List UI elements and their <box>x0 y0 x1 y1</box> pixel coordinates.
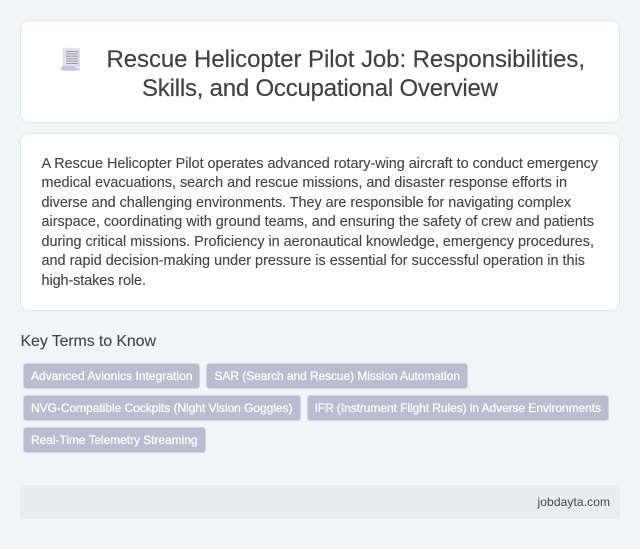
text block: description: and rapid decision-making under pressure is essential for successful operation in this <box>42 253 585 269</box>
tag: IFR: IFR (Instrument Flight Rules) in Adverse Environments <box>314 401 601 415</box>
footer <box>20 485 620 519</box>
tag: advanced avionics <box>24 364 200 388</box>
footer: jobdayta.com <box>536 495 610 509</box>
text block: description <box>42 156 599 289</box>
text block: description: diverse and challenging environments. They are responsible for navigating complex <box>42 195 572 211</box>
icon: document scroll <box>61 48 80 71</box>
tag: advanced avionics: Advanced Avionics Integration <box>31 369 192 383</box>
text block: description: during critical missions. Proficiency in aeronautical knowledge, emergency procedures, <box>42 234 594 250</box>
text block: description: A Rescue Helicopter Pilot operates advanced rotary-wing aircraft to conduct emergency <box>42 156 599 172</box>
tag: NVG: NVG-Compatible Cockpits (Night Vision Goggles) <box>31 401 292 415</box>
tag: NVG <box>24 396 300 420</box>
tag: IFR <box>308 396 608 420</box>
heading: key terms: Key Terms to Know <box>20 333 156 350</box>
title <box>106 46 585 102</box>
tag: SAR: SAR (Search and Rescue) Mission Automation <box>214 369 460 383</box>
text block: description: airspace, coordinating with ground teams, and ensuring the safety of crew and patients <box>42 214 594 230</box>
tag: telemetry <box>24 428 206 452</box>
tag list <box>24 364 608 452</box>
text block: description: medical evacuations, search and rescue missions, and disaster response efforts in <box>42 175 567 191</box>
panel: description <box>20 134 620 310</box>
panel: header <box>20 20 620 122</box>
title: Rescue Helicopter Pilot Job: Responsibilities, <box>106 46 585 73</box>
text block: description: high-stakes role. <box>42 273 146 289</box>
title: Skills, and Occupational Overview <box>142 75 499 102</box>
tag: SAR <box>206 364 468 388</box>
tag: telemetry: Real-Time Telemetry Streaming <box>31 433 198 447</box>
